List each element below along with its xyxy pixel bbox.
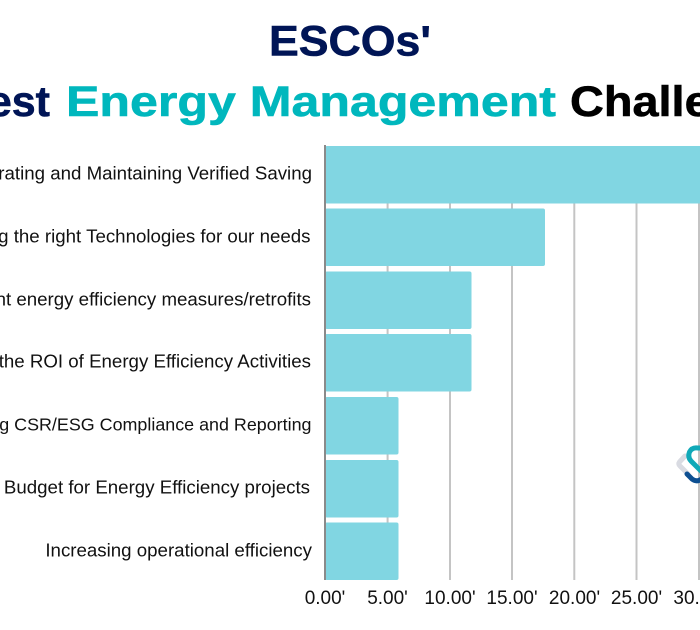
category labels: Increasing operational efficiency (45, 540, 313, 560)
axis labels (305, 588, 700, 609)
title line 2: Energy Management (66, 78, 556, 126)
gridlines (388, 146, 699, 580)
vertical axis (324, 145, 326, 580)
axis labels: 15.00' (486, 588, 538, 609)
bars (325, 146, 700, 580)
title line 1: ESCOs' (269, 18, 431, 66)
axis labels: 0.00' (305, 588, 345, 609)
axis labels: 5.00' (367, 588, 408, 609)
icon: logo (679, 448, 700, 481)
category labels (0, 162, 313, 560)
category labels: Budget for Energy Efficiency projects (4, 476, 310, 498)
axis labels: 20.00' (549, 588, 600, 609)
axis labels: 10.00' (424, 588, 476, 609)
title line 2 (0, 78, 700, 126)
axis labels: 25.00' (611, 588, 662, 609)
